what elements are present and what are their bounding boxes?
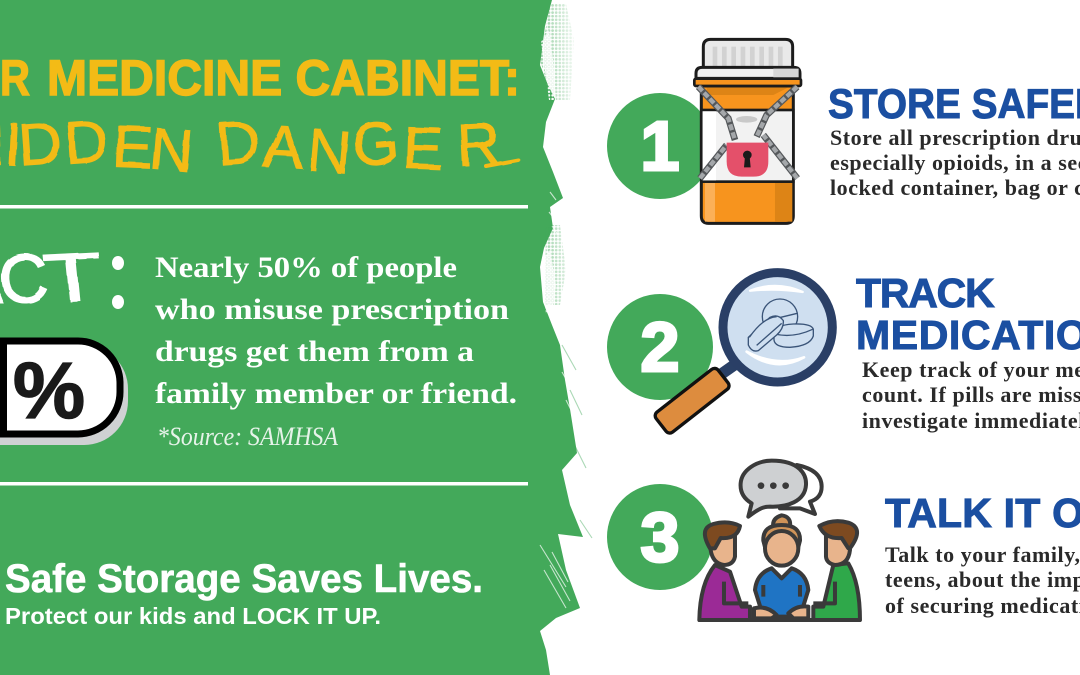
- source note: *Source: SAMHSA: [157, 422, 338, 451]
- divider rule top: [0, 205, 528, 208]
- stat badge: 50%: %: [13, 346, 85, 435]
- divider rule bottom: [0, 482, 528, 486]
- panel: green brushed background: [0, 0, 592, 675]
- icon: magnifying glass over pills: [653, 273, 832, 435]
- stat badge: 50%: [0, 341, 128, 445]
- text block: fact statement: who misuse prescription: [155, 293, 509, 326]
- text block: fact statement: [155, 251, 517, 410]
- text block: store description: [830, 125, 1080, 200]
- slogan: safe storage saves lives: Safe Storage Saves Lives.: [5, 557, 483, 601]
- text block: track description: [862, 357, 1080, 433]
- text block: talk description: [885, 542, 1080, 618]
- step 1 number circle: 1: [641, 107, 679, 185]
- heading: track medications: [856, 270, 1080, 358]
- heading: fact handwritten: T: [40, 238, 105, 317]
- icon: three people talking: [698, 461, 861, 620]
- text block: fact statement: drugs get them from a: [155, 335, 474, 368]
- text block: fact statement: Nearly 50% of people: [155, 251, 457, 284]
- step 3 number circle: [607, 484, 713, 590]
- title: your medicine cabinet: MEDICINE CABINET:: [47, 50, 520, 106]
- step 3 number circle: 3: [641, 498, 679, 576]
- step 2 number circle: [607, 294, 713, 400]
- colon dots of fact heading: [112, 256, 124, 309]
- heading: track medications: TRACK: [856, 270, 995, 316]
- slogan: safe storage saves lives: Protect our kids and LOCK IT UP.: [5, 603, 381, 629]
- slogan: safe storage saves lives: [5, 557, 483, 629]
- heading: fact handwritten: [0, 238, 105, 318]
- icon: locked pill bottle: [694, 39, 801, 223]
- step 1 number circle: [607, 93, 713, 199]
- step 2 number circle: 2: [641, 308, 679, 386]
- text block: fact statement: family member or friend.: [155, 377, 517, 410]
